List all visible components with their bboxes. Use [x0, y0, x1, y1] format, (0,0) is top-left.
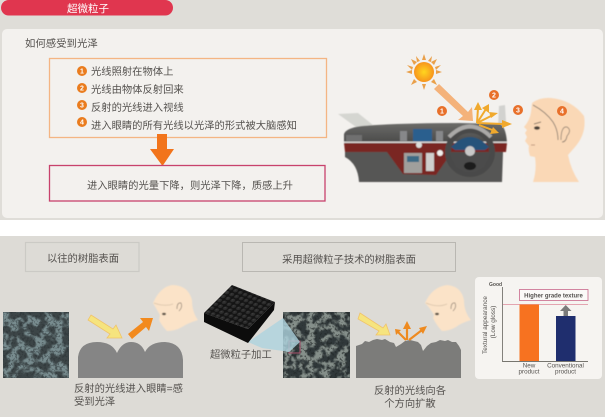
marker 1 — [437, 106, 447, 116]
step 3: 反射的光线进入视线 — [91, 101, 184, 114]
arrow: improvement — [560, 305, 572, 316]
marker 2 — [489, 90, 499, 100]
caption: ultrafine particle processing: 超微粒子加工 — [210, 348, 272, 361]
label: new product: New — [523, 362, 536, 370]
steering wheel — [448, 130, 492, 174]
step 4 — [77, 117, 297, 132]
heading box: resin surface with ultrafine particles: 采用超微粒子技术的树脂表面 — [282, 253, 416, 266]
icon: head, conventional — [153, 285, 198, 331]
y axis label: Textural appearance — [482, 296, 489, 354]
arrow: down to conclusion — [150, 134, 174, 166]
step 3 — [77, 100, 184, 114]
light blue magnification beam — [248, 318, 300, 352]
label: conventional product: Conventional — [547, 362, 584, 370]
caption: reflected light scatters: 反射的光线向各 — [374, 384, 446, 397]
y axis label — [482, 296, 497, 354]
axes — [502, 287, 588, 362]
caption: reflected light scatters: 个方向扩散 — [384, 397, 436, 410]
icon: black particle block — [204, 285, 275, 343]
pill heading: ultrafine particles: 超微粒子 — [67, 2, 109, 15]
trim strip — [344, 142, 507, 143]
heading box: resin surface with ultrafine particles — [242, 242, 456, 272]
panel: how gloss is perceived — [2, 29, 603, 218]
label: new product — [518, 362, 540, 376]
diagram: conventional smooth bumps — [78, 342, 183, 378]
chart panel: textural appearance — [475, 277, 602, 379]
y axis label: (Low gloss) — [490, 306, 497, 338]
centre console — [404, 153, 422, 173]
caption: reflected light scatters — [374, 384, 446, 410]
heading: how gloss is perceived: 如何感受到光泽 — [25, 37, 98, 50]
step 1: 1 — [80, 68, 84, 76]
bar: conventional product — [556, 316, 576, 361]
marker 3: 3 — [516, 108, 520, 114]
heading box: conventional resin surface — [26, 242, 139, 272]
caption: reflected light enters the eye: 反射的光线进入眼睛=感 — [74, 382, 183, 395]
illustration: dashboard sunlight reflection — [338, 105, 507, 182]
icon: head profile — [524, 98, 585, 182]
lower dash — [345, 152, 503, 182]
step 3: 3 — [80, 102, 84, 110]
arrows: scattered light — [395, 321, 427, 340]
diagram: rough matte surface — [356, 339, 461, 378]
step 1: 光线照射在物体上 — [91, 65, 173, 78]
marker 2: 2 — [492, 92, 496, 100]
icon: head, processed — [425, 285, 471, 331]
icon: sun — [406, 54, 442, 90]
marker 4 — [557, 106, 567, 116]
step 4: 进入眼睛的所有光线以光泽的形式被大脑感知 — [91, 119, 297, 132]
heading box: conventional resin surface: 以往的树脂表面 — [47, 252, 119, 265]
label: conventional product: product — [555, 368, 576, 376]
label: good: Good — [489, 282, 502, 288]
marker 4: 4 — [560, 108, 564, 116]
step 4: 4 — [80, 120, 84, 126]
arrow: incoming sunlight — [434, 84, 473, 121]
arrow: incoming light, conventional — [88, 315, 122, 338]
bottom section background — [0, 236, 605, 417]
magnified area marker — [289, 341, 300, 353]
photo: conventional surface texture — [3, 312, 69, 378]
step 2: 光线由物体反射回来 — [91, 83, 184, 96]
caption: reflected light enters the eye — [74, 382, 183, 408]
callout: higher grade texture: Higher grade texture — [524, 294, 584, 300]
red wood trim — [344, 143, 507, 175]
marker 1: 1 — [440, 108, 444, 116]
caption: reflected light enters the eye: 受到光泽 — [74, 395, 115, 408]
conclusion box — [50, 166, 325, 201]
reflected light arrows — [474, 102, 512, 134]
bar: new product — [520, 304, 539, 361]
dashboard top — [344, 123, 507, 143]
steps box — [50, 58, 326, 138]
arrow: reflected light, conventional — [128, 318, 153, 339]
pill heading: ultrafine particles — [1, 0, 173, 16]
step 2: 2 — [80, 86, 84, 92]
label: conventional product — [547, 362, 584, 376]
reference line — [503, 304, 588, 306]
top section background — [0, 0, 605, 220]
mirror — [498, 105, 506, 128]
photo: processed surface texture — [283, 312, 350, 378]
label: new product: product — [518, 368, 540, 376]
conclusion box: 进入眼睛的光量下降，则光泽下降，质感上升 — [87, 179, 293, 192]
arrow: incoming light, processed — [358, 313, 390, 335]
navigation screen — [413, 129, 432, 142]
marker 3 — [513, 105, 523, 115]
windshield pillar — [338, 113, 373, 127]
